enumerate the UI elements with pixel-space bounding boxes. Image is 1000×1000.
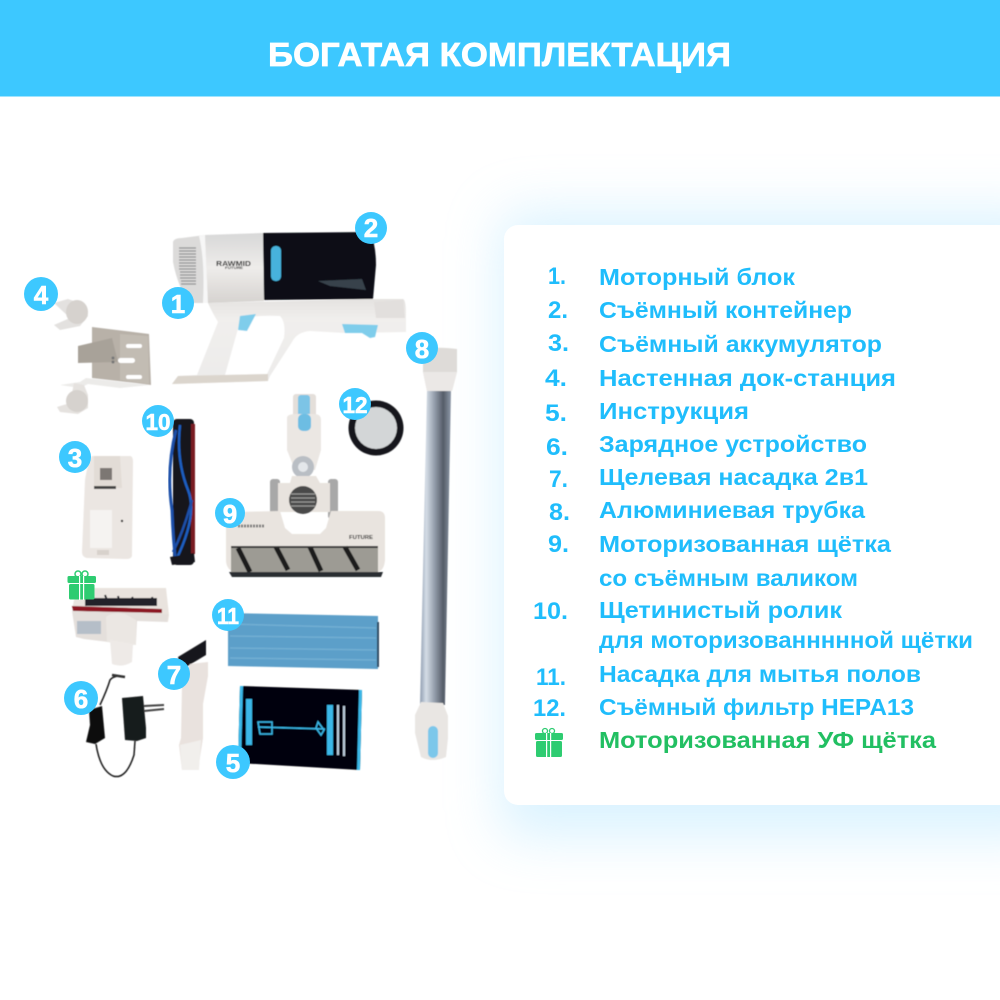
item 3: 3. xyxy=(548,330,569,357)
item 9: 9. xyxy=(548,531,569,558)
item 4: Настенная док-станция xyxy=(599,365,896,391)
item 3: Съёмный аккумулятор xyxy=(599,331,882,357)
badge 1: 1 xyxy=(171,289,185,319)
badge 7: 7 xyxy=(167,660,181,690)
item 2: 2. xyxy=(548,297,568,324)
badge 6 xyxy=(64,681,98,715)
product: crevice tool xyxy=(178,640,208,770)
product: motor unit: FUTURE xyxy=(225,266,244,270)
badge 6: 6 xyxy=(74,684,88,714)
badge 11: 11 xyxy=(217,603,239,629)
product: battery xyxy=(82,456,133,559)
panel: parts list xyxy=(504,225,1000,805)
badge 8: 8 xyxy=(415,334,429,364)
item 1: 1. xyxy=(548,263,566,290)
item 7: 7. xyxy=(549,466,568,493)
item 8 xyxy=(549,497,865,526)
badge 12: 12 xyxy=(342,392,368,418)
icon: gift in list xyxy=(535,728,563,757)
badge 11 xyxy=(212,599,244,631)
bonus item: Моторизованная УФ щётка xyxy=(599,727,936,753)
badge 2 xyxy=(355,212,387,244)
product: motorised brush: FUTURE xyxy=(349,535,373,541)
badge 8 xyxy=(406,332,438,364)
item 12: 12. xyxy=(533,695,566,722)
item 1 xyxy=(548,263,796,290)
badge 1 xyxy=(162,287,194,319)
item 7 xyxy=(549,464,868,493)
badge 9 xyxy=(215,498,245,529)
product: HEPA filter xyxy=(348,400,404,456)
badge 12 xyxy=(339,388,371,420)
item 11: 11. xyxy=(536,664,566,691)
item 2: Съёмный контейнер xyxy=(599,297,852,323)
item 12: Съёмный фильтр HEPA13 xyxy=(599,694,914,720)
badge 3 xyxy=(59,441,91,473)
item 10: 10. xyxy=(533,598,568,625)
item 6: 6. xyxy=(546,434,568,461)
badge 5 xyxy=(216,745,250,779)
product: manual xyxy=(238,686,362,770)
product: bristle roller xyxy=(170,419,195,565)
item 7: Щелевая насадка 2в1 xyxy=(599,464,868,490)
item 4: 4. xyxy=(545,365,567,392)
product: aluminium tube xyxy=(415,348,457,760)
product: UV brush xyxy=(72,588,169,666)
item 6: Зарядное устройство xyxy=(599,431,867,457)
item 8: Алюминиевая трубка xyxy=(599,497,865,523)
item 11: Насадка для мытья полов xyxy=(599,661,921,687)
badge 10 xyxy=(142,405,174,437)
badge 4 xyxy=(24,277,58,311)
product: charger xyxy=(86,675,164,777)
item 10: Щетинистый ролик xyxy=(599,597,843,623)
item 8: 8. xyxy=(549,499,570,526)
product: mop pad xyxy=(228,613,379,669)
title: БОГАТАЯ КОМПЛЕКТАЦИЯ xyxy=(268,36,731,73)
item 6 xyxy=(546,431,867,461)
item 5 xyxy=(545,398,749,427)
item 5: Инструкция xyxy=(599,398,749,424)
item 9: со съёмным валиком xyxy=(599,565,858,591)
product: motorised brush xyxy=(226,394,385,577)
badge 7 xyxy=(158,658,190,690)
item 9 xyxy=(548,531,891,591)
icon: gift on UV brush xyxy=(68,571,96,600)
item 9: Моторизованная щётка xyxy=(599,531,891,557)
badge 3: 3 xyxy=(68,443,82,473)
product: motor unit: RAWMID xyxy=(216,261,251,268)
badge 4: 4 xyxy=(34,280,49,310)
badge 2: 2 xyxy=(364,213,378,243)
item 10: для моторизованнннной щётки xyxy=(599,627,973,653)
item 11 xyxy=(536,661,921,691)
item 10 xyxy=(533,597,973,653)
header bar xyxy=(0,0,1000,96)
badge 5: 5 xyxy=(226,748,240,778)
badge 9: 9 xyxy=(223,499,237,529)
item 1: Моторный блок xyxy=(599,264,796,290)
product: wall dock xyxy=(54,299,151,414)
item 5: 5. xyxy=(545,400,567,427)
product: motor unit xyxy=(172,232,406,384)
badge 10: 10 xyxy=(146,409,170,435)
